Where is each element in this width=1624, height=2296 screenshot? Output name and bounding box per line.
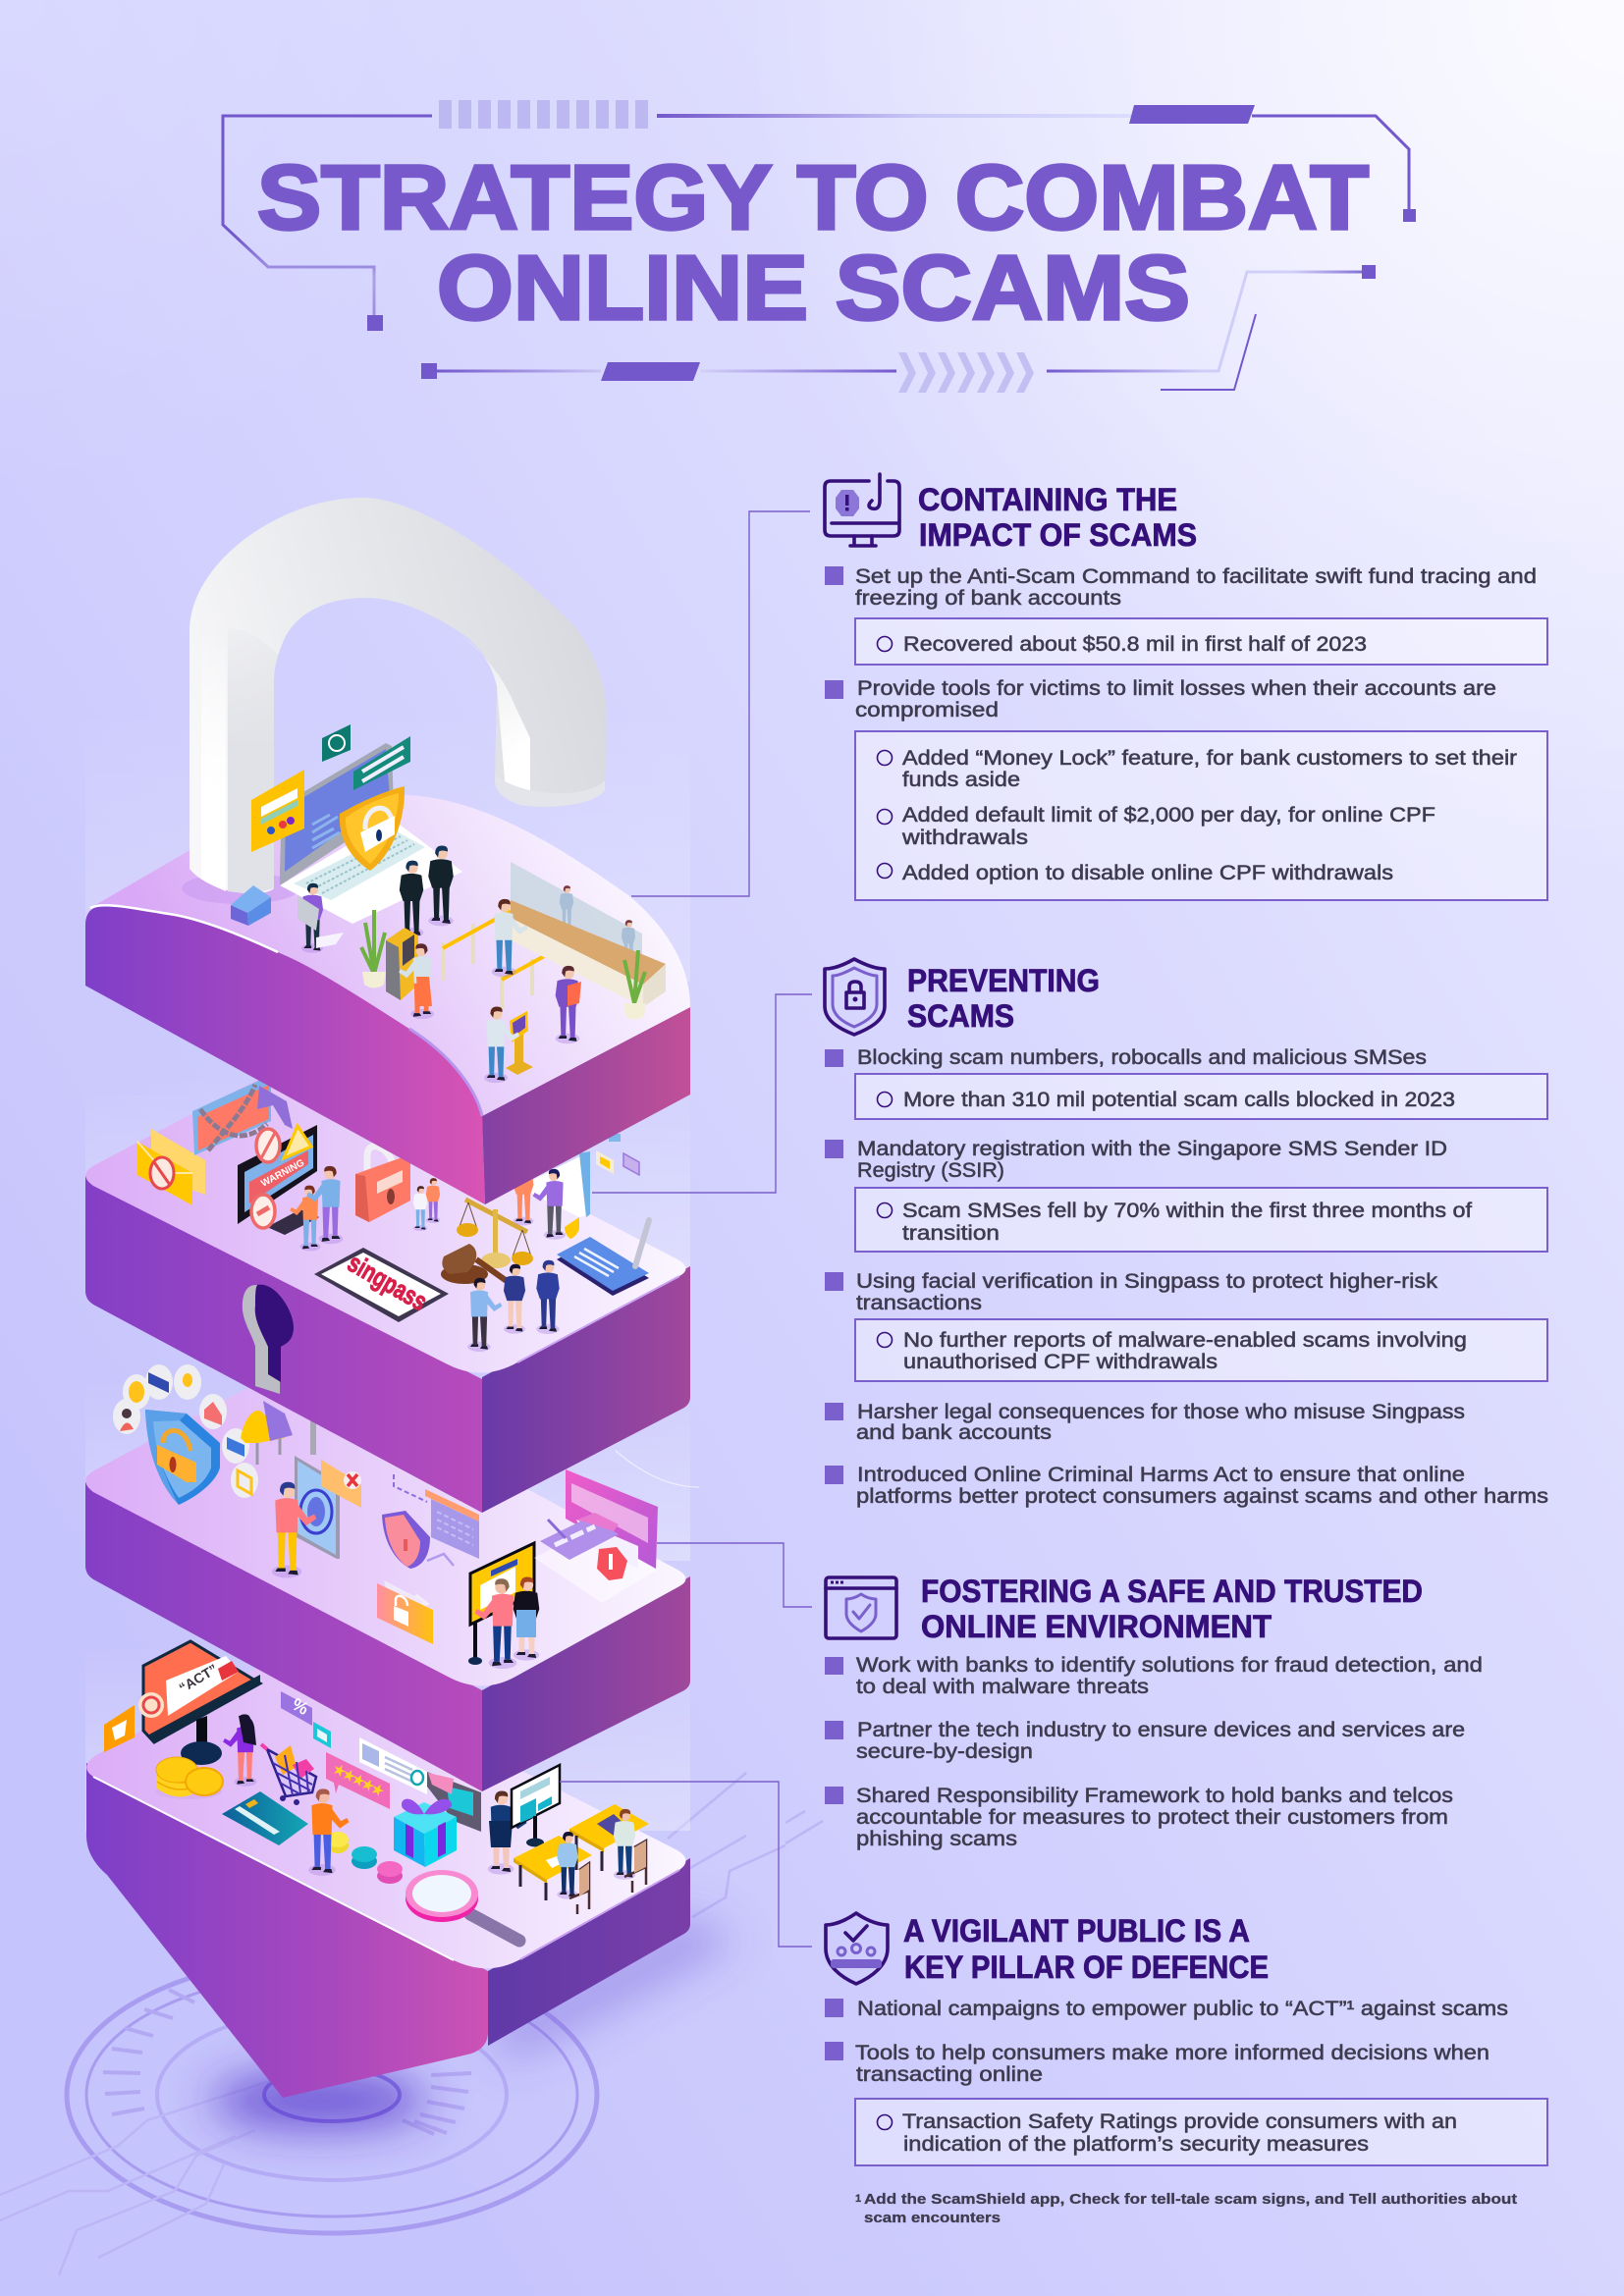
rating bubble: ★★★★★ xyxy=(329,1760,388,1801)
shopping cart xyxy=(261,1744,316,1805)
panel: fostering a safe online environment xyxy=(825,1574,1483,1850)
bullet: banks xyxy=(825,1654,1483,1698)
warning monitor: WARNING xyxy=(259,1157,306,1190)
bullet: online criminal harms act: Introduced Online Criminal Harms Act to ensure that online xyxy=(857,1464,1465,1486)
lock tier 4: vigilant public xyxy=(85,1639,690,2098)
footnote: 1 xyxy=(855,2193,861,2205)
phone and pen xyxy=(557,1220,649,1296)
scales of justice xyxy=(457,1200,533,1268)
poster board xyxy=(468,1543,534,1665)
heading xyxy=(907,963,1100,1034)
callout: scam SMSes fell: Scam SMSes fell by 70% within the first three months of xyxy=(902,1200,1472,1222)
laptop with code xyxy=(280,743,462,924)
bullet: facial verification: Using facial verification in Singpass to protect higher-risk xyxy=(856,1270,1438,1293)
bullet: shared responsibility framework: accountable for measures to protect their customers from xyxy=(856,1806,1448,1829)
billboard xyxy=(143,1641,260,1765)
police and man xyxy=(467,1260,560,1352)
glass glow tier 3 xyxy=(85,1374,690,1561)
footnote xyxy=(855,2191,1517,2226)
gold coins xyxy=(155,1757,223,1799)
man at counter xyxy=(492,899,528,977)
floating cards xyxy=(565,1134,639,1239)
man in orange checking phone xyxy=(308,1789,350,1876)
callout: no further malware reports: unauthorised CPF withdrawals xyxy=(903,1351,1218,1373)
bullet: blocking numbers: Blocking scam numbers, robocalls and malicious SMSes xyxy=(857,1046,1427,1069)
bullet: tools for victims xyxy=(825,677,1496,721)
gift box xyxy=(394,1799,457,1867)
blocked envelopes xyxy=(137,1129,205,1205)
kids xyxy=(413,1178,440,1231)
callout: tools added: Added option to disable online CPF withdrawals xyxy=(902,862,1393,884)
blue shield with padlock xyxy=(145,1410,220,1505)
callout: scam SMSes fell xyxy=(855,1188,1547,1252)
bullet: anti-scam command: Set up the Anti-Scam Command to facilitate swift fund tracing and xyxy=(855,565,1537,588)
left face tier 1 xyxy=(85,905,485,1204)
credit card xyxy=(222,1791,308,1845)
callout: tools added: funds aside xyxy=(902,769,1020,791)
coral padlock xyxy=(355,1147,410,1222)
callout: tools added: Added default limit of $2,000 per day, for online CPF xyxy=(902,804,1435,827)
bullet: legal consequences xyxy=(825,1401,1465,1444)
bullet: facial verification xyxy=(825,1270,1438,1314)
bullet: tools for victims: Provide tools for victims to limit losses when their accounts are xyxy=(857,677,1496,700)
callout: tools added: withdrawals xyxy=(901,827,1028,849)
rejected card xyxy=(321,1460,361,1508)
bullet: banks: to deal with malware threats xyxy=(856,1676,1149,1698)
profile card xyxy=(359,1737,427,1794)
callout: scam calls blocked xyxy=(855,1074,1547,1119)
heading: SCAMS xyxy=(907,998,1014,1034)
footnote: Add the ScamShield app, Check for tell-tale scam signs, and Tell authorities about xyxy=(864,2191,1517,2208)
lock tier 1: containing impact xyxy=(85,498,690,1204)
arched platform surface tier 1 xyxy=(90,794,690,1116)
platform surface tier 3 xyxy=(85,1363,686,1686)
ticket kiosk xyxy=(506,1011,533,1075)
gavel xyxy=(441,1244,507,1284)
icon: shopping tag xyxy=(104,1692,164,1752)
icon: shield with check and people xyxy=(826,1913,888,1984)
whiteboard xyxy=(512,1765,560,1847)
bullet: tools for victims: compromised xyxy=(855,699,999,721)
heading: CONTAINING THE xyxy=(918,482,1177,517)
heading: PREVENTING xyxy=(907,963,1100,998)
heading: FOSTERING A SAFE AND TRUSTED xyxy=(921,1574,1423,1609)
chained folder xyxy=(192,1075,293,1155)
panel: preventing scams xyxy=(825,959,1548,1508)
icon: shield with padlock xyxy=(825,959,885,1035)
lock tier 2: preventing scams xyxy=(85,1060,690,1513)
heading: ONLINE ENVIRONMENT xyxy=(921,1609,1272,1644)
yellow chair xyxy=(241,1401,316,1465)
padlock shackle xyxy=(182,498,607,904)
bullet: anti-scam command xyxy=(825,565,1537,610)
bullet: consumer tools: transacting online xyxy=(856,2063,1043,2086)
left face tier 2 xyxy=(85,1176,482,1513)
coral shield xyxy=(382,1511,430,1620)
bullet: legal consequences: and bank accounts xyxy=(856,1421,1052,1444)
woman at ATM xyxy=(399,943,434,1019)
service counter xyxy=(511,862,666,1007)
bullet: tech industry: secure-by-design xyxy=(856,1740,1033,1763)
police officers xyxy=(400,846,454,937)
glass glow tier 1 xyxy=(85,707,690,982)
payment card and alert xyxy=(534,1451,699,1603)
callout: recovered funds xyxy=(855,618,1547,665)
green cards xyxy=(322,724,410,790)
tablet behind gift xyxy=(427,1772,481,1832)
blue cube xyxy=(231,885,271,926)
yellow login card xyxy=(251,770,304,852)
icon: monitor with hook xyxy=(825,474,899,546)
right face tier 1 xyxy=(482,1007,690,1204)
right face tier 3 xyxy=(482,1576,690,1791)
target rings and circuit lines under the lock xyxy=(0,1773,823,2275)
footnote: scam encounters xyxy=(864,2210,1001,2226)
couple at poster board xyxy=(474,1576,539,1669)
icon bubbles xyxy=(113,1364,258,1498)
title xyxy=(257,146,1369,339)
bullet: legal consequences: Harsher legal consequences for those who misuse Singpass xyxy=(857,1401,1465,1423)
bullet: shared responsibility framework xyxy=(825,1785,1453,1850)
bullet: SSIR registration: Registry (SSIR) xyxy=(857,1159,1004,1182)
bullet: shared responsibility framework: phishing scams xyxy=(856,1828,1017,1850)
desks with seated people xyxy=(514,1804,649,1914)
heading: A VIGILANT PUBLIC IS A xyxy=(903,1913,1250,1949)
connector lines xyxy=(560,511,812,1947)
callout: transaction safety ratings xyxy=(855,2099,1547,2165)
bullet: SSIR registration: Mandatory registration with the Singapore SMS Sender ID xyxy=(857,1138,1447,1160)
queue stanchions xyxy=(443,911,566,1009)
bullet: shared responsibility framework: Shared Responsibility Framework to hold banks and telcos xyxy=(856,1785,1453,1807)
gold shield with padlock xyxy=(340,786,405,871)
man at fingerprint scanner xyxy=(272,1482,316,1577)
man at kiosk xyxy=(484,1006,519,1083)
magnifier xyxy=(406,1870,519,1941)
callout: tools added xyxy=(855,731,1547,900)
digital panel and people xyxy=(514,1151,590,1240)
two people at monitor xyxy=(290,1166,343,1251)
bullet: consumer tools xyxy=(825,2042,1489,2086)
bullet: tech industry: Partner the tech industry to ensure devices and services are xyxy=(857,1719,1465,1741)
bullet: banks: Work with banks to identify solutions for fraud detection, and xyxy=(856,1654,1483,1677)
platform surface tier 2 xyxy=(85,1060,686,1373)
bullet: SSIR registration xyxy=(825,1138,1447,1182)
lock tier 3: safe online environment xyxy=(85,1363,699,1791)
bullet: online criminal harms act xyxy=(825,1464,1548,1508)
panel: containing the impact of scams xyxy=(825,474,1547,900)
ATM xyxy=(386,928,418,1000)
callout: tools added: Added “Money Lock” feature, for bank customers to set their xyxy=(902,747,1517,770)
bullet: anti-scam command: freezing of bank accounts xyxy=(855,587,1121,610)
callout: transaction safety ratings: Transaction Safety Ratings provide consumers with an xyxy=(902,2110,1457,2133)
rating bubble xyxy=(326,1752,390,1809)
dashed circuit board xyxy=(394,1474,479,1566)
heading xyxy=(903,1913,1269,1985)
icon: browser window with shield xyxy=(826,1577,896,1638)
bullet: national campaigns: National campaigns to empower public to “ACT”¹ against scams xyxy=(857,1998,1508,2020)
woman in purple xyxy=(556,966,581,1043)
percent tag xyxy=(281,1691,331,1748)
left face tier 3 xyxy=(85,1482,482,1791)
callout: scam SMSes fell: transition xyxy=(902,1222,1000,1245)
woman presenting at whiteboard xyxy=(488,1790,527,1875)
bullet: tech industry xyxy=(825,1719,1465,1763)
bullet: consumer tools: Tools to help consumers make more informed decisions when xyxy=(855,2042,1489,2064)
callout: recovered funds: Recovered about $50.8 mil in first half of 2023 xyxy=(903,633,1367,656)
woman with long hair xyxy=(223,1714,256,1787)
warning monitor xyxy=(238,1125,319,1235)
glass glow tier 4 xyxy=(85,1639,690,1831)
singpass tablet: singpass xyxy=(343,1248,432,1316)
glass glow tier 2 xyxy=(85,1070,690,1276)
woman on laptop xyxy=(298,883,344,953)
right face tier 4 xyxy=(488,1858,690,2046)
callout: no further malware reports xyxy=(855,1319,1547,1381)
callout: transaction safety ratings: indication of the platform’s security measures xyxy=(903,2133,1369,2156)
heading: KEY PILLAR OF DEFENCE xyxy=(904,1949,1269,1985)
bullet: online criminal harms act: platforms better protect consumers against scams and other harms xyxy=(856,1485,1548,1508)
fingerprint tablet xyxy=(295,1456,340,1559)
title: STRATEGY TO COMBAT xyxy=(257,146,1369,248)
panel: a vigilant public xyxy=(825,1913,1547,2226)
coloured discs xyxy=(327,1832,403,1884)
percent tag: % xyxy=(289,1694,312,1719)
bullet: facial verification: transactions xyxy=(856,1292,982,1314)
title frame decoration xyxy=(223,100,1416,393)
locked folder xyxy=(377,1580,433,1644)
keyhole xyxy=(243,1285,294,1394)
platform surface tier 4 xyxy=(86,1651,686,1968)
shadow under the lock xyxy=(211,1914,736,2130)
right face tier 2 xyxy=(482,1266,690,1513)
billboard: “ACT” xyxy=(176,1661,220,1696)
title: ONLINE SCAMS xyxy=(437,237,1190,339)
potted plant xyxy=(361,910,386,988)
heading xyxy=(918,482,1197,553)
singpass tablet xyxy=(314,1248,449,1322)
callout: no further malware reports: No further reports of malware-enabled scams involving xyxy=(903,1329,1467,1352)
heading xyxy=(921,1574,1423,1644)
second plant xyxy=(623,950,646,1019)
heading: IMPACT OF SCAMS xyxy=(919,517,1197,553)
left face tier 4 xyxy=(86,1763,488,2098)
callout: scam calls blocked: More than 310 mil potential scam calls blocked in 2023 xyxy=(903,1089,1455,1111)
